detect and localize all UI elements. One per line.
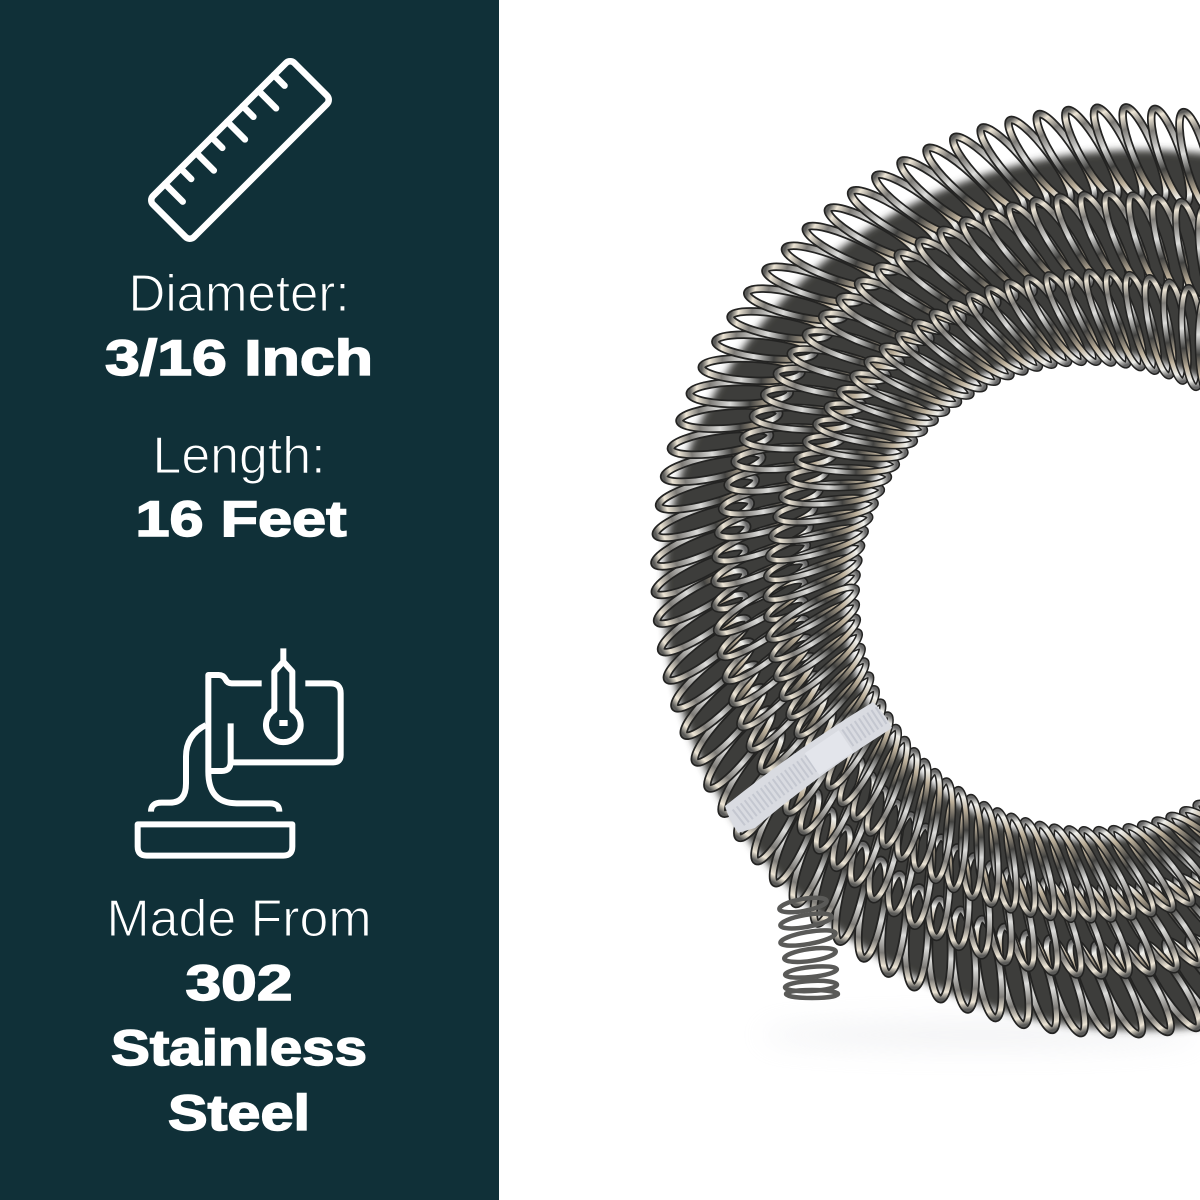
plastic retaining ring	[725, 702, 892, 833]
text: material value line 1: 302	[186, 955, 292, 1011]
text: material value line 3: Steel	[168, 1085, 310, 1141]
text: diameter value: 3/16 Inch	[105, 330, 373, 386]
coil: middle winding	[689, 169, 1200, 1001]
panel: specifications	[0, 0, 499, 1200]
icon: heat treatment machine with thermometer	[138, 648, 341, 856]
text: material value line 2: Stainless	[111, 1020, 367, 1076]
text: material label: Made From	[106, 890, 372, 948]
product photo: stainless steel coil	[499, 0, 1200, 1200]
coil: outer winding	[627, 80, 1200, 1062]
coil: loose spring tail	[778, 895, 838, 998]
text: length value: 16 Feet	[136, 491, 347, 547]
coil: inner winding	[743, 249, 1200, 943]
text: length label: Length:	[152, 427, 326, 485]
icon: ruler	[149, 59, 331, 241]
text: diameter label: Diameter:	[128, 265, 350, 323]
